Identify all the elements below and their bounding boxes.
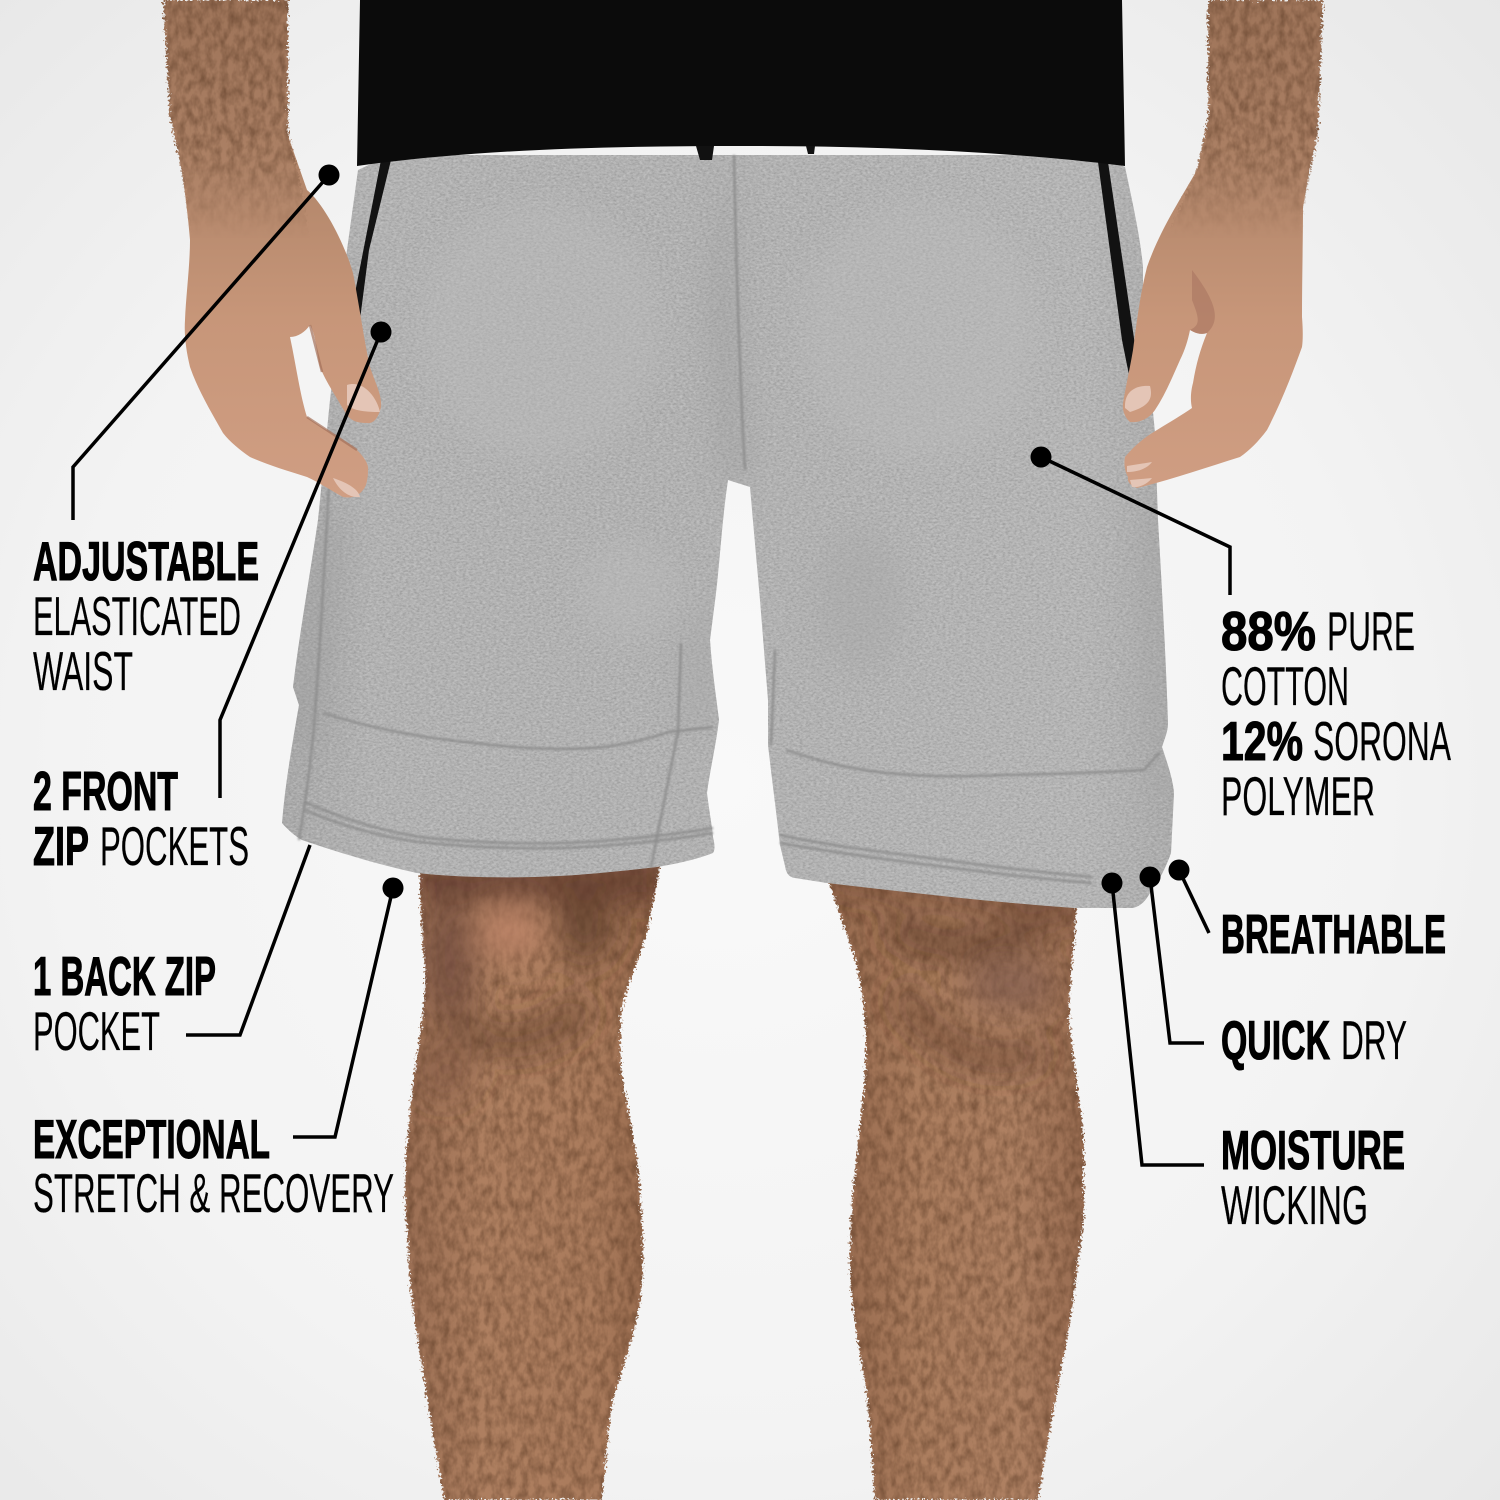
leader line: front pockets bbox=[220, 332, 381, 798]
callout: 1 back zip pocket: POCKET bbox=[33, 1000, 160, 1062]
shorts fabric shading bbox=[297, 210, 1028, 726]
right arm and hand bbox=[1123, 0, 1323, 488]
callout: exceptional stretch and recovery: EXCEPTIONAL bbox=[33, 1108, 270, 1170]
callout: moisture wicking bbox=[1102, 872, 1405, 1236]
right thumbnail bbox=[1125, 386, 1151, 412]
left thumbnail bbox=[347, 384, 380, 412]
callout: quick dry bbox=[1140, 866, 1407, 1071]
left forearm bbox=[163, 0, 310, 240]
drawcord bbox=[696, 146, 815, 160]
callout: breathable bbox=[1168, 860, 1446, 965]
leader line: stretch bbox=[293, 888, 393, 1137]
callout: adjustable elasticated waist: ADJUSTABLE bbox=[33, 530, 259, 592]
callout: 2 front zip pockets bbox=[33, 322, 392, 877]
left fingernail bbox=[333, 478, 360, 497]
callout: adjustable elasticated waist: WAIST bbox=[33, 640, 133, 702]
left leg bbox=[405, 860, 665, 1500]
grey shorts bbox=[282, 155, 1174, 908]
callout: fabric composition: PURE bbox=[1327, 600, 1415, 662]
callout: exceptional stretch and recovery: STRETCH & RECOVERY bbox=[33, 1162, 394, 1224]
leader line: fabric bbox=[1041, 457, 1230, 595]
callout: adjustable elasticated waist bbox=[33, 164, 340, 702]
callout: 2 front zip pockets: POCKETS bbox=[100, 815, 249, 877]
callout: 2 front zip pockets: 2 FRONT bbox=[33, 760, 178, 822]
leader line: breathable bbox=[1179, 870, 1209, 933]
callout: 2 front zip pockets: ZIP bbox=[33, 815, 89, 877]
callout: 1 back zip pocket: 1 BACK ZIP bbox=[33, 945, 216, 1007]
callout: moisture wicking: WICKING bbox=[1221, 1174, 1368, 1236]
black t-shirt bbox=[357, 0, 1125, 166]
left zip pocket bbox=[355, 160, 391, 335]
leader line: waist bbox=[73, 175, 329, 520]
callout: fabric composition: COTTON bbox=[1221, 655, 1349, 717]
right leg bbox=[825, 865, 1084, 1500]
callout: fabric composition: POLYMER bbox=[1221, 765, 1375, 827]
left finger crease shading bbox=[307, 325, 357, 450]
callout: fabric composition: 88% bbox=[1221, 600, 1316, 662]
callout: exceptional stretch and recovery bbox=[33, 878, 404, 1224]
hem seams bbox=[299, 155, 1160, 883]
callout: quick dry: QUICK bbox=[1221, 1009, 1330, 1071]
callout: fabric composition: 12% bbox=[1221, 710, 1303, 772]
right fingernails bbox=[1127, 462, 1152, 487]
photo: man wearing grey shorts bbox=[163, 0, 1323, 1500]
leader line: back pocket bbox=[186, 845, 310, 1035]
left arm and hand bbox=[163, 0, 381, 497]
callout: quick dry: DRY bbox=[1341, 1009, 1407, 1071]
right zip pocket bbox=[1098, 162, 1135, 380]
leader line: moisture bbox=[1112, 883, 1204, 1165]
right forearm bbox=[1178, 0, 1326, 226]
callout: fabric composition bbox=[1030, 446, 1451, 827]
callout: 1 back zip pocket bbox=[33, 845, 310, 1062]
callout: adjustable elasticated waist: ELASTICATED bbox=[33, 585, 241, 647]
right hand shadow bbox=[1190, 270, 1215, 334]
leader line: quick dry bbox=[1150, 877, 1204, 1043]
